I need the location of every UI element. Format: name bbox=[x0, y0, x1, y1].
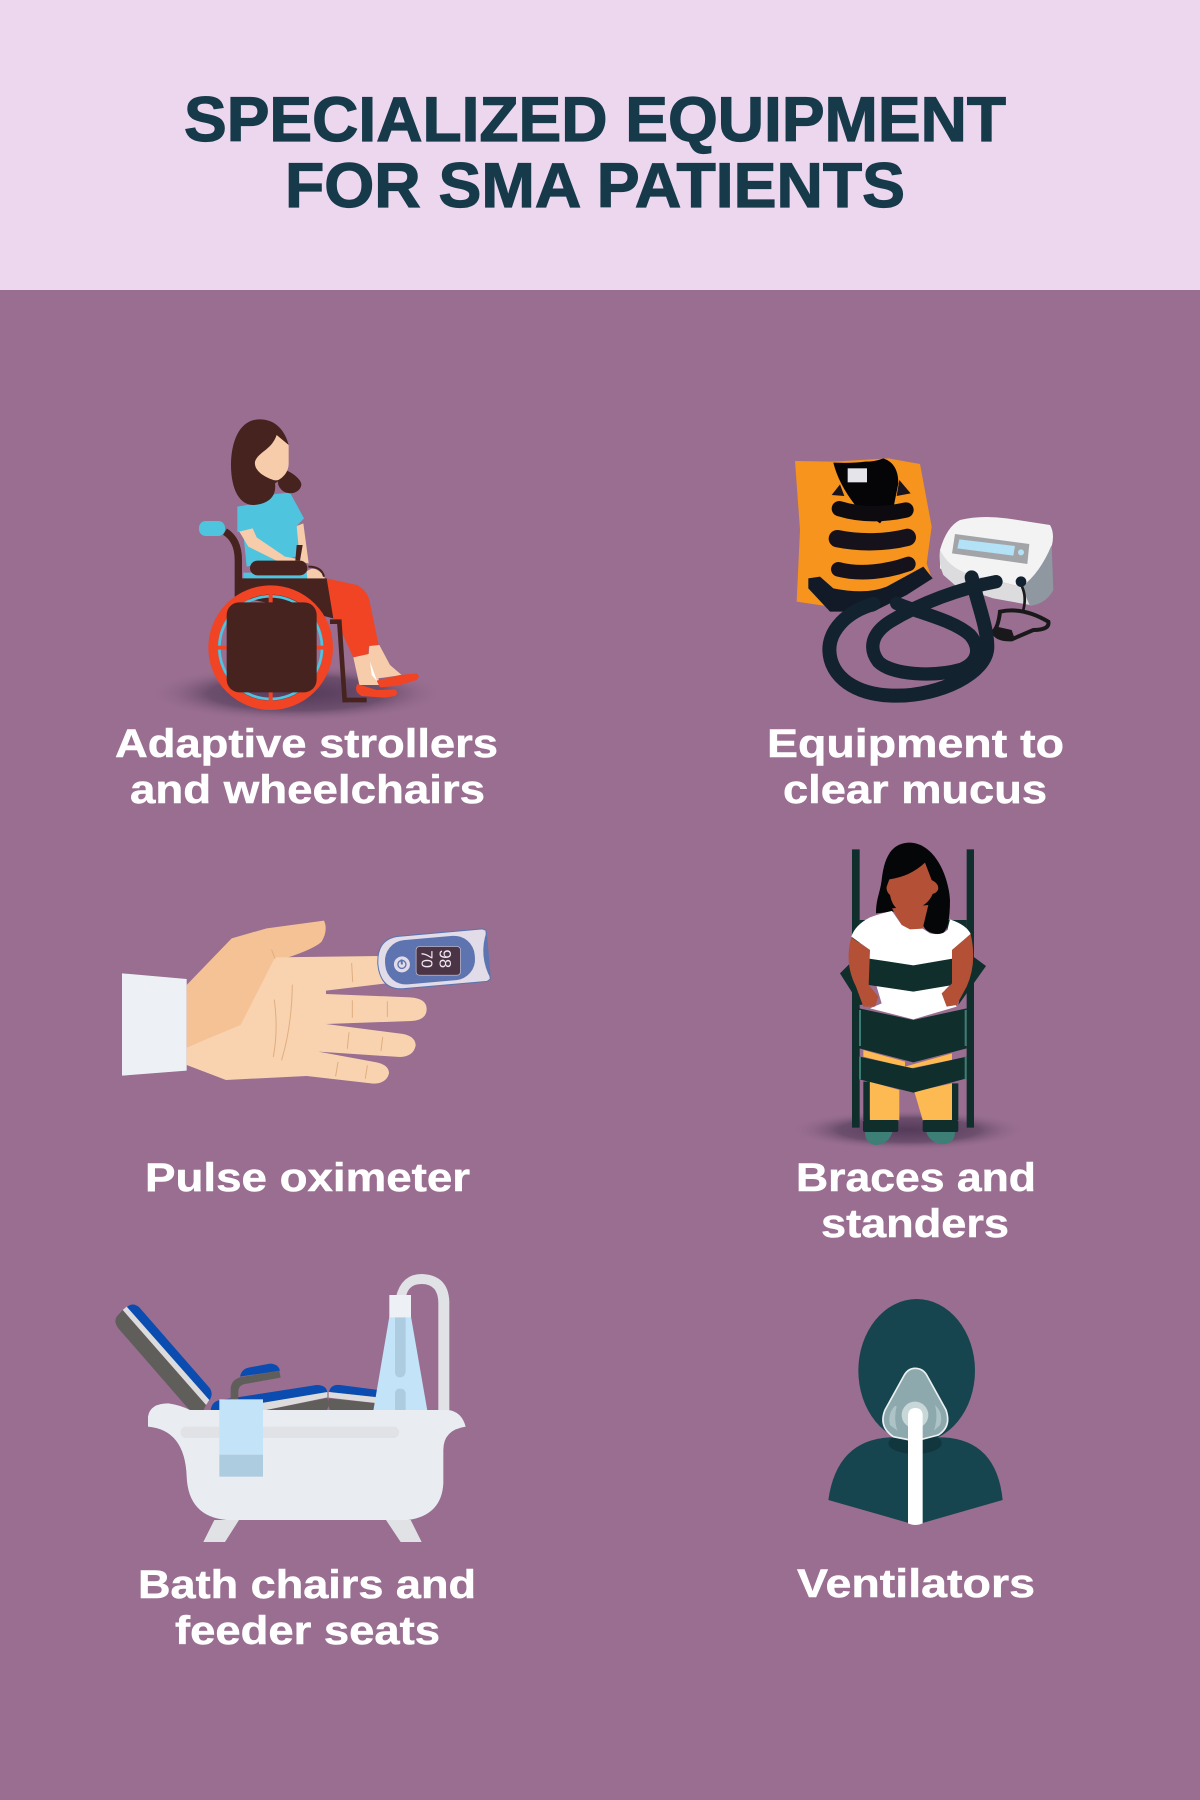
panel: pulse oximeter bbox=[122, 921, 491, 1200]
panel: equipment to clear mucus bbox=[767, 458, 1064, 812]
pulse oximeter bbox=[376, 929, 491, 991]
label: Pulse oximeter bbox=[145, 1156, 470, 1200]
pulse oximeter: 98 bbox=[435, 950, 454, 968]
icon: woman in wheelchair bbox=[150, 419, 443, 722]
icon: girl in stander bbox=[792, 843, 1025, 1150]
icon: hand with pulse oximeter bbox=[122, 921, 491, 1084]
label: Bath chairs and bbox=[138, 1563, 476, 1607]
title: FOR SMA PATIENTS bbox=[285, 151, 905, 221]
title bbox=[184, 85, 1006, 221]
label: Braces and bbox=[796, 1156, 1036, 1200]
icon: airway clearance vest and machine bbox=[795, 458, 1053, 696]
label: Equipment to bbox=[767, 722, 1064, 766]
label: and wheelchairs bbox=[130, 768, 485, 812]
title: SPECIALIZED EQUIPMENT bbox=[184, 85, 1006, 155]
icon: person with ventilator mask bbox=[828, 1299, 1003, 1525]
label bbox=[767, 722, 1064, 812]
label bbox=[138, 1563, 476, 1653]
label: feeder seats bbox=[175, 1609, 440, 1653]
header band bbox=[0, 0, 1200, 290]
panel: ventilators bbox=[797, 1299, 1035, 1606]
icon: bath chair in tub bbox=[115, 1274, 466, 1542]
label: standers bbox=[821, 1202, 1009, 1246]
pulse oximeter: 70 bbox=[417, 950, 434, 968]
label: Ventilators bbox=[797, 1562, 1035, 1606]
label: Adaptive strollers bbox=[115, 722, 498, 766]
panel: braces and standers bbox=[792, 843, 1036, 1246]
label bbox=[115, 722, 498, 812]
panel: bath chairs and feeder seats bbox=[115, 1274, 476, 1653]
label: clear mucus bbox=[783, 768, 1047, 812]
label bbox=[796, 1156, 1036, 1246]
panel: adaptive strollers and wheelchairs bbox=[115, 419, 498, 812]
